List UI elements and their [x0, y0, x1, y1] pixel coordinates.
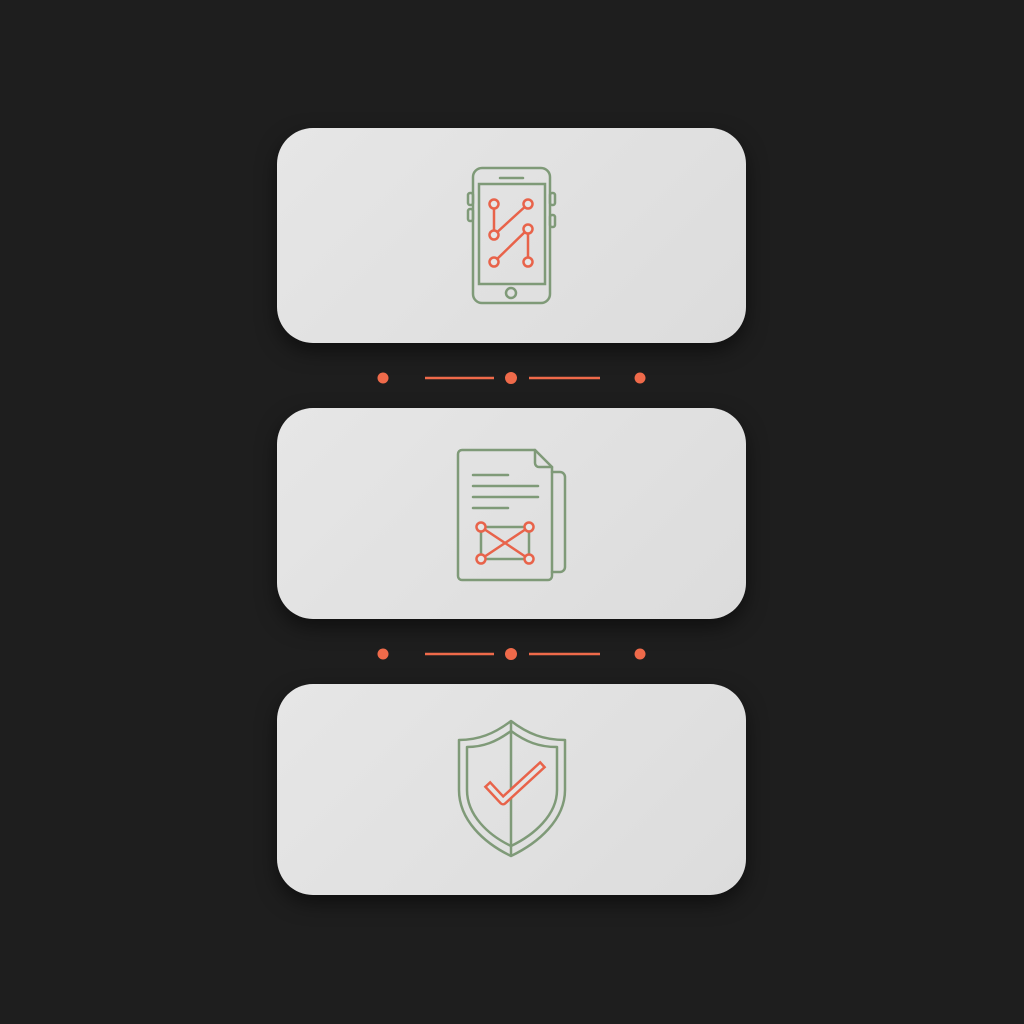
- icon: document with network: [458, 450, 565, 580]
- card: document: [277, 408, 746, 619]
- icon: shield with check: [459, 721, 565, 856]
- card: shield: [277, 684, 746, 895]
- connector 1: [378, 372, 646, 384]
- connector 2: [378, 648, 646, 660]
- icon: phone with network: [468, 168, 555, 303]
- card: phone: [277, 128, 746, 343]
